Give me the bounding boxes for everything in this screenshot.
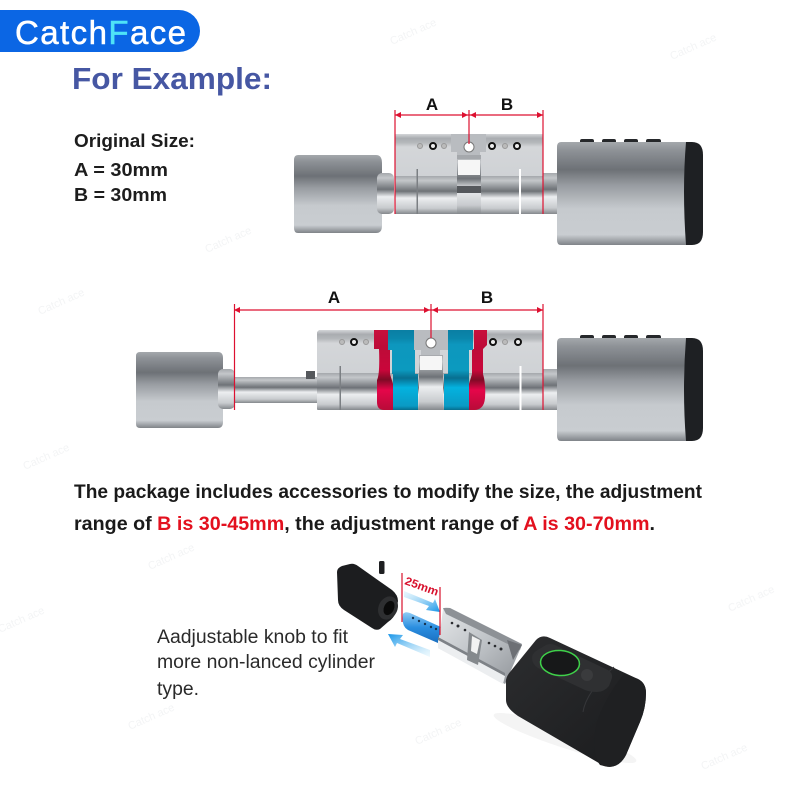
black lock body xyxy=(506,636,646,767)
dimension lines A and B xyxy=(395,110,543,214)
watermarks: Catch ace xyxy=(726,584,776,615)
centre cutout xyxy=(457,155,481,214)
watermarks: Catch ace xyxy=(388,17,438,48)
original size text block: A = 30mm xyxy=(74,160,168,180)
centre cutout xyxy=(419,355,443,410)
cylinder upper xyxy=(395,134,543,177)
arrow left xyxy=(388,634,430,657)
watermarks: Catch ace xyxy=(203,225,253,256)
red spacers xyxy=(374,330,487,410)
cylinder upper xyxy=(317,330,543,374)
slots xyxy=(340,366,522,410)
centre plate xyxy=(451,134,486,155)
cylinder xyxy=(438,607,522,684)
original size text block: Original Size: xyxy=(74,131,195,151)
collar xyxy=(377,173,394,214)
watermarks: Catch ace xyxy=(699,742,749,773)
centre hole xyxy=(426,338,436,348)
cylinder holes xyxy=(451,622,502,650)
left knob xyxy=(294,155,382,233)
lock body xyxy=(557,335,703,441)
centre plate xyxy=(413,330,448,355)
logo badge: CatchFace xyxy=(15,14,186,51)
knob description text: Aadjustable knob to fit xyxy=(157,627,349,648)
collar xyxy=(218,369,235,409)
seam xyxy=(583,667,614,712)
button xyxy=(581,669,593,681)
label B: B xyxy=(481,288,493,307)
package description text: range of B is 30-45mm, the adjustment range of A is 30-70mm. xyxy=(74,514,655,535)
lock diagram: original size xyxy=(294,95,703,245)
watermarks: Catch ace xyxy=(21,442,71,473)
label B: B xyxy=(501,95,513,114)
original size text block xyxy=(74,131,195,205)
25mm label: 25mm xyxy=(403,576,440,599)
exploded smart lock illustration xyxy=(337,561,646,771)
package description text: The package includes accessories to modify the size, the adjustment xyxy=(74,482,703,503)
fingerprint panel xyxy=(532,644,612,692)
fingerprint sensor ring xyxy=(540,649,580,677)
dimension lines A and B xyxy=(234,304,543,410)
watermarks: Catch ace xyxy=(413,717,463,748)
watermarks: Catch ace xyxy=(146,542,196,573)
label A: A xyxy=(328,288,340,307)
watermarks: Catch ace xyxy=(668,32,718,63)
watermarks: Catch ace xyxy=(126,702,176,733)
ground shadow xyxy=(491,705,639,771)
black knob xyxy=(337,564,402,630)
pin holes xyxy=(412,617,437,630)
shaft xyxy=(543,173,558,214)
end cap xyxy=(594,674,646,767)
extension rod xyxy=(235,377,319,403)
cylinder holes xyxy=(340,339,521,345)
arrow right xyxy=(404,591,440,612)
blue spacers xyxy=(388,330,473,410)
watermarks: Catch ace xyxy=(36,287,86,318)
extension pin xyxy=(403,612,441,643)
set screw xyxy=(379,561,384,574)
25mm marker lines xyxy=(402,573,440,635)
label A: A xyxy=(426,95,438,114)
knob description text: type. xyxy=(157,679,199,700)
cylinder slots xyxy=(416,169,521,214)
shaft xyxy=(543,369,558,410)
lock body xyxy=(557,139,703,245)
set screw xyxy=(306,371,315,379)
heading: For Example: xyxy=(72,61,272,96)
cylinder holes xyxy=(418,142,520,152)
cylinder lower xyxy=(317,373,543,410)
lock diagram: adjusted size xyxy=(136,288,703,441)
original size text block: B = 30mm xyxy=(74,185,167,205)
cylinder lower xyxy=(395,176,543,214)
left knob xyxy=(136,352,223,428)
knob description text: more non-lanced cylinder xyxy=(157,652,376,673)
knob description text xyxy=(157,627,376,700)
package description text xyxy=(74,482,703,535)
